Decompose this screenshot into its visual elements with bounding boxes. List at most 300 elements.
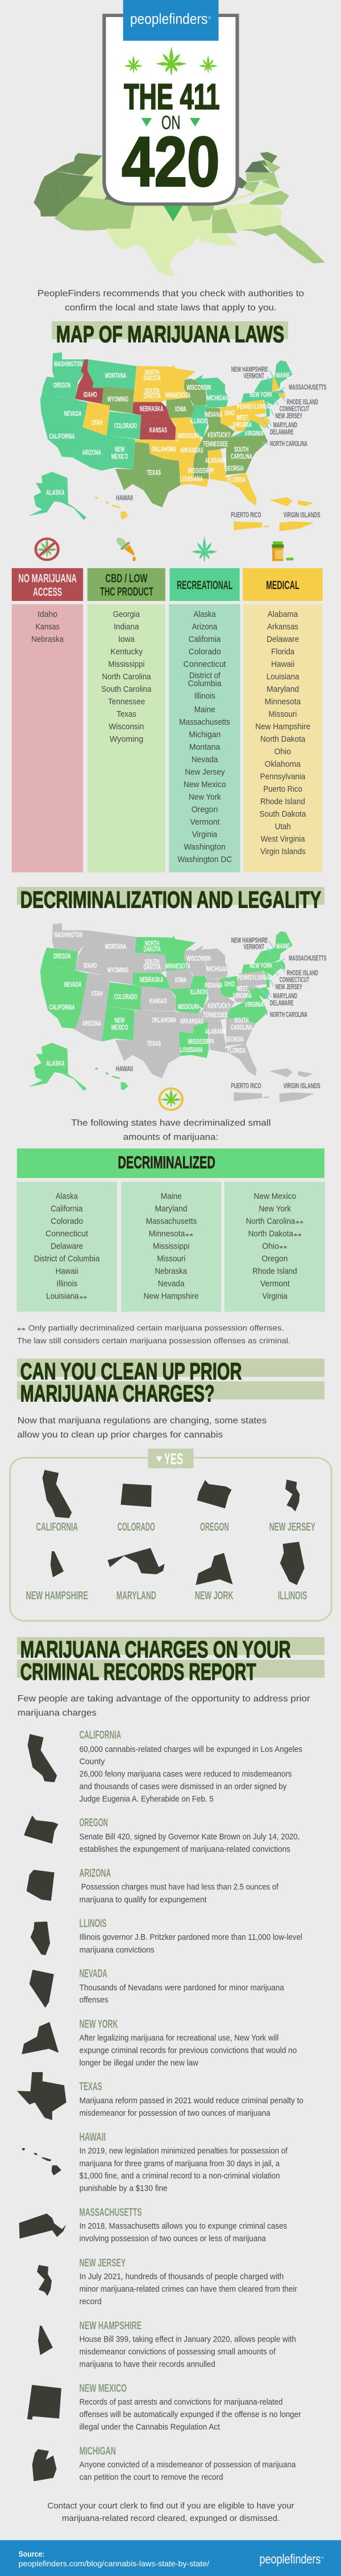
state labels: KANSAS	[149, 426, 167, 434]
panel: CBD / low THC product: North Carolina	[102, 673, 151, 682]
panel: decriminalized column 2: Maine	[161, 1192, 182, 1201]
yes tab: YES	[164, 1451, 183, 1468]
icon: Illinois	[280, 1542, 305, 1585]
title text	[122, 77, 219, 201]
panel: decriminalized column 3: **	[279, 1245, 288, 1253]
panel: recreational: New Mexico	[184, 780, 226, 789]
item: New York: NEW YORK	[80, 2018, 118, 2031]
panel: medical: Florida	[271, 647, 294, 657]
state labels: MAINE	[276, 942, 290, 950]
state labels: MARYLAND	[273, 991, 297, 1000]
panel: medical: Rhode Island	[260, 797, 305, 806]
state labels: COLORADO	[114, 993, 137, 1001]
item: Massachusetts: MASSACHUSETTS	[80, 2206, 142, 2219]
panel: no marijuana access: NO MARIJUANA	[18, 571, 77, 585]
panel: recreational: Michigan	[189, 730, 221, 739]
panel: decriminalized column 2	[121, 1182, 221, 1312]
state labels: NORTH	[145, 368, 159, 377]
panel: medical: Arkansas	[267, 622, 298, 632]
logo tab	[123, 0, 219, 41]
footnote: **	[17, 1326, 26, 1335]
state names: ILLINOIS	[278, 1589, 307, 1602]
state labels: VERMONT	[244, 943, 264, 951]
states: recreational	[28, 352, 293, 520]
text: clean up intro	[17, 1415, 267, 1440]
state labels: MAINE	[276, 371, 290, 379]
item: Illinois: marijuana convictions	[80, 1945, 155, 1955]
states: medical	[82, 365, 314, 531]
icon: no marijuana	[36, 537, 59, 560]
item: Illinois: Illinois governor J.B. Pritzker pardoned more than 11,000 low-level	[80, 1933, 302, 1942]
panel: medical: Alabama	[268, 610, 298, 619]
states: no access	[75, 359, 176, 440]
state labels: VIRGINIA	[244, 429, 264, 438]
item: New York: After legalizing marijuana for recreational use, New York will	[80, 2033, 278, 2043]
state labels: ARIZONA	[82, 1019, 101, 1027]
state labels: DELAWARE	[270, 428, 294, 436]
panel: decriminalized column 3: Vermont	[260, 1279, 290, 1288]
panel: decriminalized column 3: Ohio	[262, 1242, 279, 1251]
state labels: PENNSYLVANIA	[237, 973, 270, 981]
panel: CBD / low THC product: South Carolina	[101, 684, 152, 694]
panel: CBD / low THC product: Georgia	[113, 610, 140, 619]
state labels: INDIANA	[205, 410, 223, 418]
item: New Mexico: offenses will be automatically expunged if the offense is no longer	[80, 2410, 301, 2419]
item: Illinois: LLINOIS	[80, 1917, 107, 1930]
text: records intro: Few people are taking advantage of the opportunity to address prior	[18, 1693, 310, 1704]
state labels: KANSAS	[149, 997, 167, 1005]
state labels: NEW	[115, 1016, 125, 1024]
panel: medical: MEDICAL	[266, 578, 300, 592]
panel: decriminalized column 1: Illinois	[56, 1279, 77, 1288]
panel: decriminalized column 3: New York	[259, 1204, 291, 1213]
state labels: NORTH CAROLINA	[270, 1010, 307, 1019]
state labels: NEW HAMPSHIRE	[231, 936, 268, 944]
map: marijuana laws by state	[28, 352, 326, 531]
state labels: SOUTH	[234, 445, 248, 453]
panel: recreational: Maine	[194, 705, 215, 715]
state names: OREGON	[200, 1521, 229, 1533]
panel: no marijuana access: Nebraska	[31, 635, 64, 644]
state labels: ALASKA	[46, 1059, 65, 1068]
item: California: County	[80, 1757, 105, 1766]
item: Massachusetts: involving possession of two ounces or less of marijuana	[80, 2234, 267, 2243]
state labels: WEST	[236, 413, 248, 422]
panel: decriminalized column 1: Hawaii	[56, 1267, 78, 1276]
icon: California	[43, 1470, 72, 1518]
panel: decriminalized column 2: Nevada	[158, 1279, 185, 1288]
state labels: GEORGIA	[225, 464, 244, 472]
state labels: KENTUCKY	[207, 1002, 231, 1010]
panel: CBD / low THC product: Tennessee	[108, 697, 145, 707]
state labels: TENNESSEE	[203, 1011, 228, 1019]
state labels: NEW JERSEY	[275, 412, 302, 420]
panel: decriminalized column 2: Mississippi	[153, 1242, 189, 1251]
panel: recreational: Vermont	[190, 817, 220, 827]
text: records intro: marijuana charges	[18, 1707, 97, 1718]
state labels: DAKOTA	[144, 963, 161, 971]
heading: can you clean up prior marijuana charges: MARIJUANA CHARGES?	[20, 1380, 215, 1407]
state labels: OREGON	[53, 381, 70, 389]
state labels: OHIO	[224, 980, 235, 988]
state names: NEW JORK	[195, 1589, 234, 1602]
item: Massachusetts	[19, 2206, 287, 2243]
item: Oregon: OREGON	[80, 1817, 108, 1829]
state labels: UTAH	[92, 989, 102, 998]
panel: recreational: Massachusetts	[179, 718, 230, 727]
state labels: ALABAMA	[205, 1027, 227, 1036]
intro text	[38, 288, 304, 313]
state labels: ILLINOIS	[190, 987, 208, 996]
item: Michigan: can petition the court to remove the record	[80, 2473, 223, 2482]
text: decriminalized intro	[71, 1117, 271, 1142]
state labels: CALIFORNIA	[49, 1003, 75, 1011]
panel: decriminalized column 1: Delaware	[51, 1242, 83, 1251]
panel: CBD / low THC product: THC PRODUCT	[100, 585, 153, 598]
state labels: IDAHO	[84, 390, 97, 399]
state labels: CONNECTICUT	[280, 405, 309, 413]
panel: recreational: Illinois	[194, 692, 215, 701]
state names: NEW HAMPSHIRE	[26, 1589, 88, 1602]
state labels: SOUTH	[145, 957, 159, 966]
item: Texas	[17, 2072, 303, 2120]
state labels: MINNESOTA	[165, 391, 190, 399]
icon: New Hampshire	[51, 1551, 64, 1577]
panel: no marijuana access: Kansas	[35, 622, 60, 632]
state labels: MICHIGAN	[207, 394, 228, 402]
state labels: CALIFORNIA	[49, 432, 75, 440]
title shield	[104, 0, 237, 221]
panel: decriminalized column 2: Missouri	[157, 1254, 185, 1263]
item: California: 60,000 cannabis-related charges will be expunged in Los Angeles	[80, 1745, 302, 1754]
panel: decriminalized column 2: New Hampshire	[144, 1292, 199, 1301]
item: New Hampshire: House Bill 399, taking effect in January 2020, allows people with	[80, 2335, 296, 2344]
panel: medical: Delaware	[267, 635, 299, 644]
heading: marijuana charges on your criminal records report	[17, 1636, 325, 1686]
footer logo: TM	[321, 2557, 323, 2560]
panel: decriminalized header: DECRIMINALIZED	[118, 1153, 215, 1172]
text: decriminalized intro: amounts of marijuana:	[123, 1132, 218, 1142]
map: decriminalization	[28, 923, 326, 1102]
icon: dropper	[115, 536, 136, 561]
state labels: IOWA	[175, 976, 186, 984]
text: records intro	[18, 1693, 310, 1718]
item: Michigan: Anyone convicted of a misdemeanor of possession of marijuana	[80, 2460, 296, 2470]
footer logo: peoplefinders	[260, 2552, 321, 2566]
item: New Jersey: record	[80, 2297, 102, 2306]
state labels: WISCONSIN	[186, 954, 211, 963]
panel: decriminalized column 1: Alaska	[56, 1192, 78, 1201]
panel: recreational: New York	[189, 792, 221, 802]
state labels: PUERTO RICO	[231, 1082, 261, 1090]
icon: New Jersey	[285, 1480, 300, 1511]
item: New Hampshire	[38, 2319, 296, 2369]
panel: medical: Louisiana	[267, 673, 300, 682]
item: California: and thousands of cases were dismissed in an order signed by	[80, 1782, 287, 1791]
panel: medical: South Dakota	[260, 809, 306, 819]
state labels: ARKANSAS	[180, 446, 203, 454]
panel: decriminalized column 1	[16, 1182, 117, 1312]
panel: decriminalized header	[17, 1149, 325, 1178]
panel: CBD / low THC product: Indiana	[114, 622, 139, 632]
panel: decriminalized column 1: Louisiana	[46, 1292, 79, 1301]
item: New Hampshire: misdemeanor convictions of possessing small amounts of	[80, 2347, 276, 2357]
item: Hawaii: marijuana for three grams of marijuana from 30 days in jail, a	[80, 2159, 280, 2169]
panel: decriminalized column 1: **	[79, 1295, 88, 1304]
panel: CBD / low THC product: Iowa	[118, 635, 135, 644]
panel: medical: West Virginia	[261, 834, 305, 844]
panel: decriminalized column 2: Nebraska	[155, 1267, 187, 1276]
state labels: VIRGINIA	[244, 1000, 264, 1008]
panel: medical: Ohio	[275, 747, 291, 757]
panel: recreational: District of	[189, 671, 221, 680]
state labels: MISSOURI	[178, 431, 199, 440]
item: Texas: TEXAS	[80, 2081, 102, 2093]
item: New York: longer be illegal under the new law	[80, 2058, 199, 2067]
panel: recreational: Colorado	[189, 647, 221, 657]
icon: recreational leaf	[192, 536, 218, 562]
panel: CBD / low THC product: Wisconsin	[109, 722, 144, 732]
text: clean up intro: Now that marijuana regulations are changing, some states	[18, 1415, 267, 1426]
state labels: DAKOTA	[144, 392, 161, 400]
item: New York	[22, 2018, 297, 2067]
state labels: NEW YORK	[249, 961, 273, 970]
panel: medical: Hawaii	[271, 659, 294, 669]
state labels: MISSISSIPPI	[188, 467, 214, 474]
item: Nevada	[30, 1968, 284, 2008]
state labels: NEW YORK	[249, 390, 273, 399]
panel: decriminalized column 2: Massachusetts	[146, 1217, 197, 1226]
panel: decriminalized column 3: Oregon	[261, 1254, 288, 1263]
state names: COLORADO	[118, 1521, 155, 1533]
state labels: ILLINOIS	[190, 417, 208, 425]
icon: Oregon	[197, 1480, 232, 1508]
item: New Hampshire: NEW HAMPSHIRE	[80, 2319, 142, 2332]
footnote: The law still considers certain marijuana possession offenses as criminal.	[17, 1337, 290, 1346]
icon: pill bottle	[272, 541, 294, 561]
panel: recreational: California	[189, 635, 221, 644]
state labels: TEXAS	[147, 469, 161, 477]
state labels: LOUISIANA	[180, 1046, 203, 1054]
state labels: HAWAII	[116, 1065, 133, 1073]
item: California: CALIFORNIA	[80, 1729, 121, 1741]
state names: CALIFORNIA	[36, 1521, 78, 1533]
item: New York: expunge criminal records for previous convictions that would no	[80, 2046, 297, 2055]
panel: CBD / low THC product: Texas	[117, 709, 136, 719]
state labels: CAROLINA	[231, 452, 252, 460]
state labels: NEW JERSEY	[275, 983, 302, 991]
state labels: INDIANA	[205, 981, 223, 989]
source: Source:	[19, 2550, 44, 2558]
arrow: shield pointer	[163, 205, 183, 221]
state labels: MARYLAND	[273, 421, 297, 429]
state labels	[46, 360, 326, 519]
panel: CBD / low THC product	[88, 568, 165, 872]
title text: 420	[122, 123, 219, 201]
state labels: OREGON	[53, 952, 70, 960]
panel: recreational	[169, 568, 240, 872]
panel: medical: North Dakota	[260, 735, 306, 744]
text: contact your court clerk: Contact your court clerk to find out if you are eligible to have your	[47, 2502, 294, 2511]
state labels: NEBRASKA	[140, 976, 164, 984]
state labels: ARIZONA	[82, 448, 101, 456]
shield outline	[104, 15, 237, 204]
state labels: MONTANA	[105, 371, 127, 380]
item: Nevada: NEVADA	[80, 1968, 107, 1980]
state labels: UTAH	[92, 418, 102, 427]
panel: CBD / low THC product: Wyoming	[110, 735, 143, 744]
panel: medical: New Hampshire	[255, 722, 310, 732]
panel: medical	[243, 568, 322, 872]
state names: MARYLAND	[117, 1589, 156, 1602]
panel: recreational: Columbia	[188, 679, 222, 688]
panel: recreational: New Jersey	[185, 767, 225, 777]
source	[19, 2550, 209, 2568]
state labels: NEW	[115, 445, 125, 453]
state labels: MEXICO	[111, 452, 128, 460]
panel outline	[10, 1458, 331, 1621]
logo tab: peoplefinders	[130, 11, 207, 27]
panel: decriminalized column 2: **	[185, 1232, 193, 1241]
state labels: VIRGINIA	[232, 991, 252, 999]
panel: medical: Maryland	[267, 684, 299, 694]
text: decriminalized intro: The following states have decriminalized small	[71, 1117, 271, 1128]
item: Oregon	[24, 1816, 300, 1854]
pointer lines	[260, 941, 285, 1015]
state labels: WISCONSIN	[186, 383, 211, 392]
item: Michigan: MICHIGAN	[80, 2445, 116, 2457]
logo tab: TM	[207, 17, 211, 20]
panel: recreational: Montana	[189, 743, 221, 752]
state labels: TEXAS	[147, 1040, 161, 1048]
intro text: PeopleFinders recommends that you check with authorities to	[38, 288, 304, 299]
panel: recreational: Arizona	[192, 622, 218, 632]
footnote	[17, 1324, 290, 1346]
state labels: NEVADA	[64, 980, 82, 989]
state labels: OKLAHOMA	[152, 1016, 176, 1024]
states: not decriminalized	[52, 923, 314, 1102]
item: New Jersey: minor marijuana-related crimes can have them cleared from their	[80, 2285, 297, 2294]
item: Illinois	[31, 1917, 302, 1955]
item: California: Judge Eugenia A. Eyherabide on Feb. 5	[80, 1795, 214, 1804]
state labels: ALABAMA	[205, 456, 227, 465]
state labels: DAKOTA	[144, 374, 161, 382]
icon: Colorado	[120, 1484, 152, 1507]
state labels: MICHIGAN	[207, 965, 228, 973]
text: contact your court clerk	[47, 2502, 294, 2523]
title text: ON	[161, 112, 181, 133]
state labels: DAKOTA	[144, 945, 161, 953]
panel: decriminalized column 3: **	[294, 1232, 302, 1241]
state names	[26, 1521, 315, 1602]
icon: leaves	[124, 47, 218, 75]
item: Arizona	[27, 1867, 278, 1905]
item: Arizona: marijuana to qualify for expungement	[80, 1895, 207, 1905]
panel: decriminalized column 1: Colorado	[51, 1217, 83, 1226]
panel: decriminalized column 3: North Dakota	[248, 1229, 293, 1238]
item: New Hampshire: marijuana to have their records annulled	[80, 2360, 215, 2369]
item: Nevada: Thousands of Nevadans were pardoned for minor marijuana	[80, 1983, 284, 1993]
states: decriminalized	[28, 931, 293, 1091]
panel: decriminalized column 1: Connecticut	[45, 1229, 89, 1238]
footer	[0, 2540, 341, 2576]
item: Hawaii: HAWAII	[80, 2131, 106, 2144]
icon: leaf coin	[159, 1089, 182, 1110]
panel: no marijuana access	[12, 568, 83, 872]
panel: decriminalized column 3: North Carolina	[246, 1217, 296, 1226]
panel: recreational: Connecticut	[184, 659, 226, 669]
panel: recreational: Washington	[184, 843, 226, 852]
panel: decriminalized column 2: Maryland	[155, 1204, 187, 1213]
panel: decriminalized column 3: **	[296, 1220, 303, 1229]
item: Michigan	[32, 2445, 296, 2482]
state labels: MISSOURI	[178, 1002, 199, 1011]
heading: can you clean up prior marijuana charges	[17, 1358, 325, 1407]
state labels: FLORIDA	[227, 1047, 246, 1054]
header map	[34, 152, 325, 276]
panel: decriminalized column 3: Rhode Island	[252, 1267, 297, 1276]
panel: decriminalized column 1: District of Columbia	[34, 1254, 100, 1263]
state labels: ARKANSAS	[180, 1017, 203, 1025]
item: New Mexico	[27, 2382, 301, 2432]
state labels: PENNSYLVANIA	[237, 402, 270, 410]
state labels: DELAWARE	[270, 999, 294, 1007]
title text: THE 411	[124, 77, 219, 116]
state labels: NORTH	[145, 939, 159, 948]
panel: no marijuana access: Idaho	[38, 610, 57, 619]
item: Hawaii: In 2019, new legislation minimized penalties for possession of	[80, 2146, 288, 2155]
state labels: OKLAHOMA	[152, 445, 176, 453]
state labels: WASHINGTON	[54, 931, 82, 939]
intro text: confirm the local and state laws that apply to you.	[65, 302, 277, 313]
state labels: MEXICO	[111, 1023, 128, 1031]
item: New Jersey	[37, 2256, 297, 2306]
state labels: MONTANA	[105, 942, 127, 951]
state labels: TENNESSEE	[203, 440, 228, 448]
panel: medical: Oklahoma	[265, 760, 301, 769]
panel: medical: Puerto Rico	[263, 784, 302, 794]
text: clean up intro: allow you to clean up prior charges for cannabis	[17, 1429, 223, 1440]
item: Hawaii	[22, 2131, 288, 2193]
panel: medical: Minnesota	[265, 697, 301, 707]
item: New Mexico: illegal under the Cannabis Regulation Act	[80, 2423, 220, 2432]
panel: decriminalized column 3	[224, 1182, 325, 1312]
panel: medical: Pennsylvania	[260, 772, 306, 781]
panel: yes states	[10, 1448, 331, 1621]
item: New Mexico: NEW MEXICO	[80, 2382, 127, 2395]
state labels: NEW HAMPSHIRE	[231, 365, 268, 373]
item: Massachusetts: In 2018, Massachusetts allows you to expunge criminal cases	[80, 2222, 287, 2231]
item: Oregon: Senate Bill 420, signed by Governor Kate Brown on July 14, 2020,	[80, 1833, 300, 1842]
state labels: CONNECTICUT	[280, 976, 309, 984]
panel: CBD / low THC product: Kentucky	[110, 647, 143, 657]
state labels: WASHINGTON	[54, 360, 82, 368]
state labels: NORTH CAROLINA	[270, 439, 307, 448]
item: New Jersey: NEW JERSEY	[80, 2256, 126, 2270]
state labels: SOUTH	[145, 386, 159, 395]
panel: decriminalized column 1: California	[51, 1204, 83, 1213]
state labels: VIRGINIA	[232, 421, 252, 428]
state labels: WYOMING	[107, 395, 128, 403]
footnote: Only partially decriminalized certain marijuana possession offenses.	[28, 1324, 284, 1333]
pointer lines	[260, 370, 285, 444]
item: California	[28, 1729, 302, 1804]
item: Texas: misdemeanor for possession of two ounces of marijuana	[80, 2108, 271, 2118]
state labels	[46, 931, 326, 1090]
item: Oregon: establishes the expungement of marijuana-related convictions	[80, 1844, 290, 1854]
state labels: IDAHO	[84, 961, 97, 970]
panel: recreational: Oregon	[192, 805, 218, 814]
